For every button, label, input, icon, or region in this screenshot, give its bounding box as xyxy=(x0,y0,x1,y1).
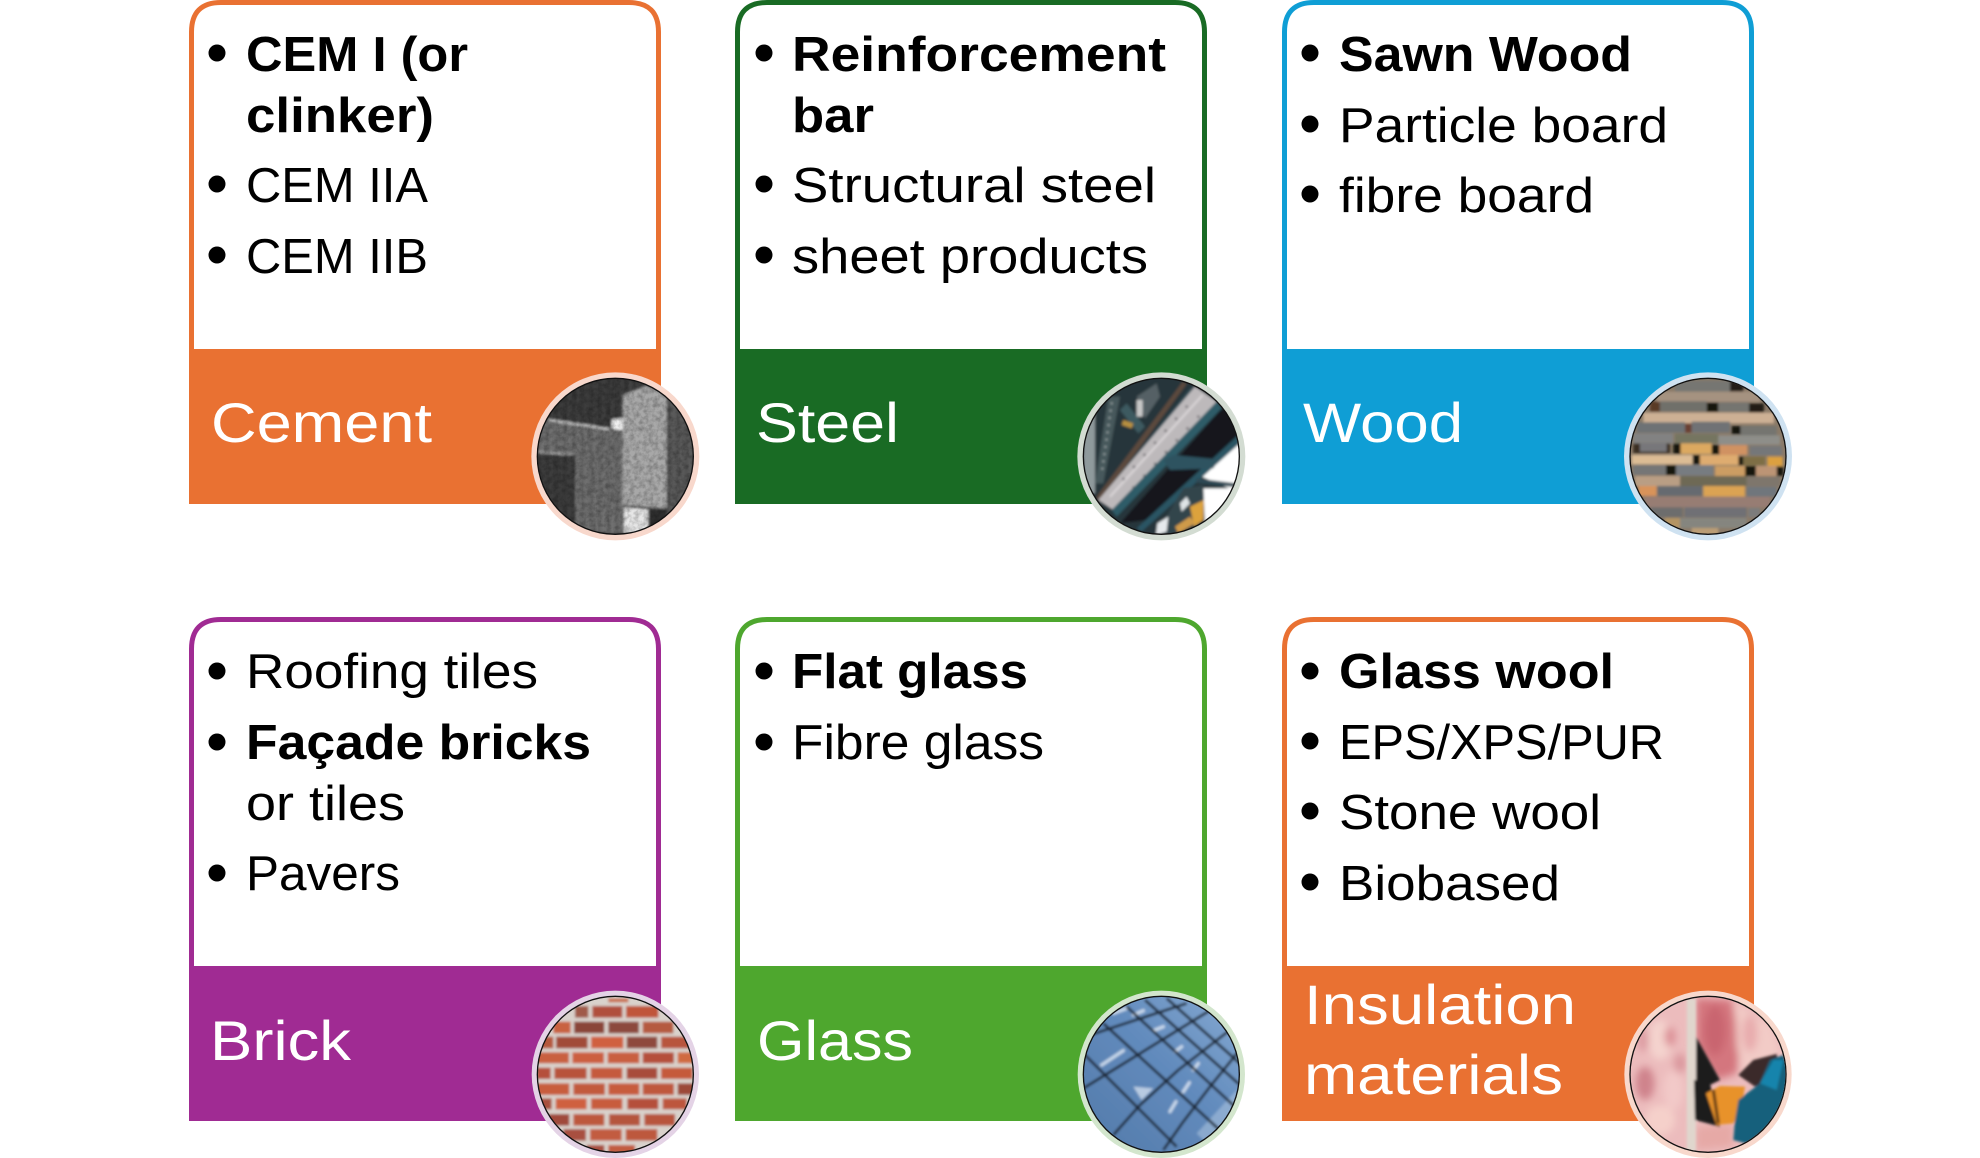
card outline: wood xyxy=(1284,2,1752,352)
list: brick types: Pavers xyxy=(246,847,400,901)
card outline: glass xyxy=(738,620,1204,969)
photo: steel bridge xyxy=(1077,372,1250,540)
card outline: brick xyxy=(192,620,658,969)
title: cement: Cement xyxy=(211,391,432,454)
list: cement types: clinker) xyxy=(246,89,434,143)
title band: glass xyxy=(735,966,1207,1121)
list: brick types xyxy=(208,645,591,901)
panel: brick xyxy=(189,620,700,1158)
list: wood types xyxy=(1302,28,1668,223)
list: insulation types: Biobased xyxy=(1339,857,1560,911)
panel: glass xyxy=(735,620,1247,1158)
list: insulation types xyxy=(1302,645,1664,911)
list: brick types: Roofing tiles xyxy=(246,645,538,699)
card outline: steel xyxy=(738,2,1204,352)
list: insulation types: Glass wool xyxy=(1339,645,1614,699)
panel: steel xyxy=(735,2,1250,540)
title band: brick xyxy=(189,966,661,1121)
list: cement types: CEM I (or xyxy=(246,28,468,82)
card outline: insulation xyxy=(1284,620,1752,969)
title band: cement xyxy=(189,349,661,504)
title: insulation materials: materials xyxy=(1304,1043,1563,1106)
list: glass types: Fibre glass xyxy=(792,716,1044,770)
photo: concrete xyxy=(531,372,700,540)
list: steel types: Reinforcement xyxy=(792,28,1166,82)
panel: wood xyxy=(1282,2,1793,540)
list: wood types: Particle board xyxy=(1339,99,1668,153)
list: glass types xyxy=(756,645,1044,770)
list: steel types: bar xyxy=(792,89,874,143)
list: insulation types: EPS/XPS/PUR xyxy=(1339,716,1664,770)
title: glass: Glass xyxy=(757,1009,913,1072)
panel: cement xyxy=(189,2,700,540)
list: cement types: CEM IIB xyxy=(246,230,428,284)
title: steel: Steel xyxy=(756,391,899,454)
photo: glass facade xyxy=(1078,991,1247,1158)
photo: brick wall xyxy=(532,991,700,1158)
title band: insulation xyxy=(1282,966,1754,1121)
card outline: cement xyxy=(192,2,658,352)
title: brick: Brick xyxy=(210,1009,352,1072)
list: cement types xyxy=(208,28,468,284)
photo: insulation installation xyxy=(1624,991,1793,1158)
title: wood: Wood xyxy=(1303,391,1463,454)
photo: stacked sawn wood xyxy=(1624,372,1793,540)
panel: insulation materials xyxy=(1282,620,1793,1158)
list: glass types: Flat glass xyxy=(792,645,1028,699)
title band: steel xyxy=(735,349,1207,504)
title: insulation materials xyxy=(1304,973,1576,1106)
list: cement types: CEM IIA xyxy=(246,159,428,213)
title: insulation materials: Insulation xyxy=(1304,973,1576,1036)
list: steel types: sheet products xyxy=(792,230,1148,284)
list: insulation types: Stone wool xyxy=(1339,786,1601,840)
list: wood types: fibre board xyxy=(1339,169,1594,223)
list: steel types: Structural steel xyxy=(792,159,1156,213)
list: steel types xyxy=(756,28,1166,284)
list: brick types: Façade bricks xyxy=(246,716,591,770)
list: brick types: or tiles xyxy=(246,777,405,831)
list: wood types: Sawn Wood xyxy=(1339,28,1632,82)
title band: wood xyxy=(1282,349,1754,504)
